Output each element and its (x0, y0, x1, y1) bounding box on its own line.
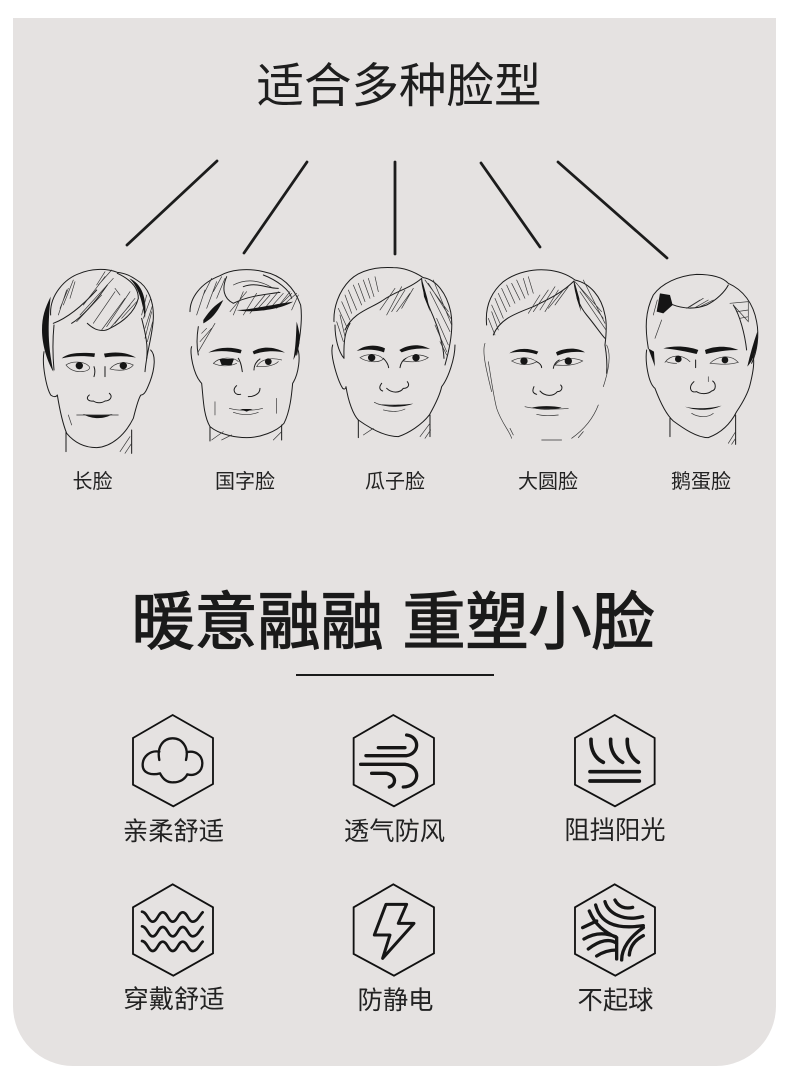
icon: soft cloud (133, 715, 213, 806)
icon: wind (354, 715, 434, 806)
face labels: 长脸 (72, 470, 112, 493)
label: sun block: 阻挡阳光 (564, 817, 666, 845)
icon: heat (575, 715, 655, 806)
face labels: 国字脸 (215, 470, 275, 493)
face labels: 大圆脸 (518, 470, 578, 493)
connector lines (127, 161, 667, 258)
face labels: 瓜子脸 (365, 470, 425, 493)
divider under heading (296, 674, 494, 676)
face: long (42, 269, 154, 453)
face: egg (646, 274, 758, 444)
face: square (190, 270, 301, 441)
face labels (72, 470, 731, 493)
face: oval-chin (332, 267, 455, 438)
label: soft: 亲柔舒适 (123, 818, 224, 846)
icon: yarn (575, 884, 655, 976)
label: anti-static: 防静电 (358, 987, 433, 1015)
title: 适合多种脸型 (256, 60, 542, 114)
face labels: 鹅蛋脸 (671, 470, 731, 493)
icon: waves (133, 884, 213, 976)
label: breathable: 透气防风 (344, 818, 445, 846)
icon: lightning (354, 884, 434, 976)
label: comfortable: 穿戴舒适 (123, 986, 225, 1014)
main heading: 暖意融融 重塑小脸 (132, 588, 654, 658)
face: round (484, 270, 609, 440)
label: anti-pilling: 不起球 (578, 987, 653, 1015)
